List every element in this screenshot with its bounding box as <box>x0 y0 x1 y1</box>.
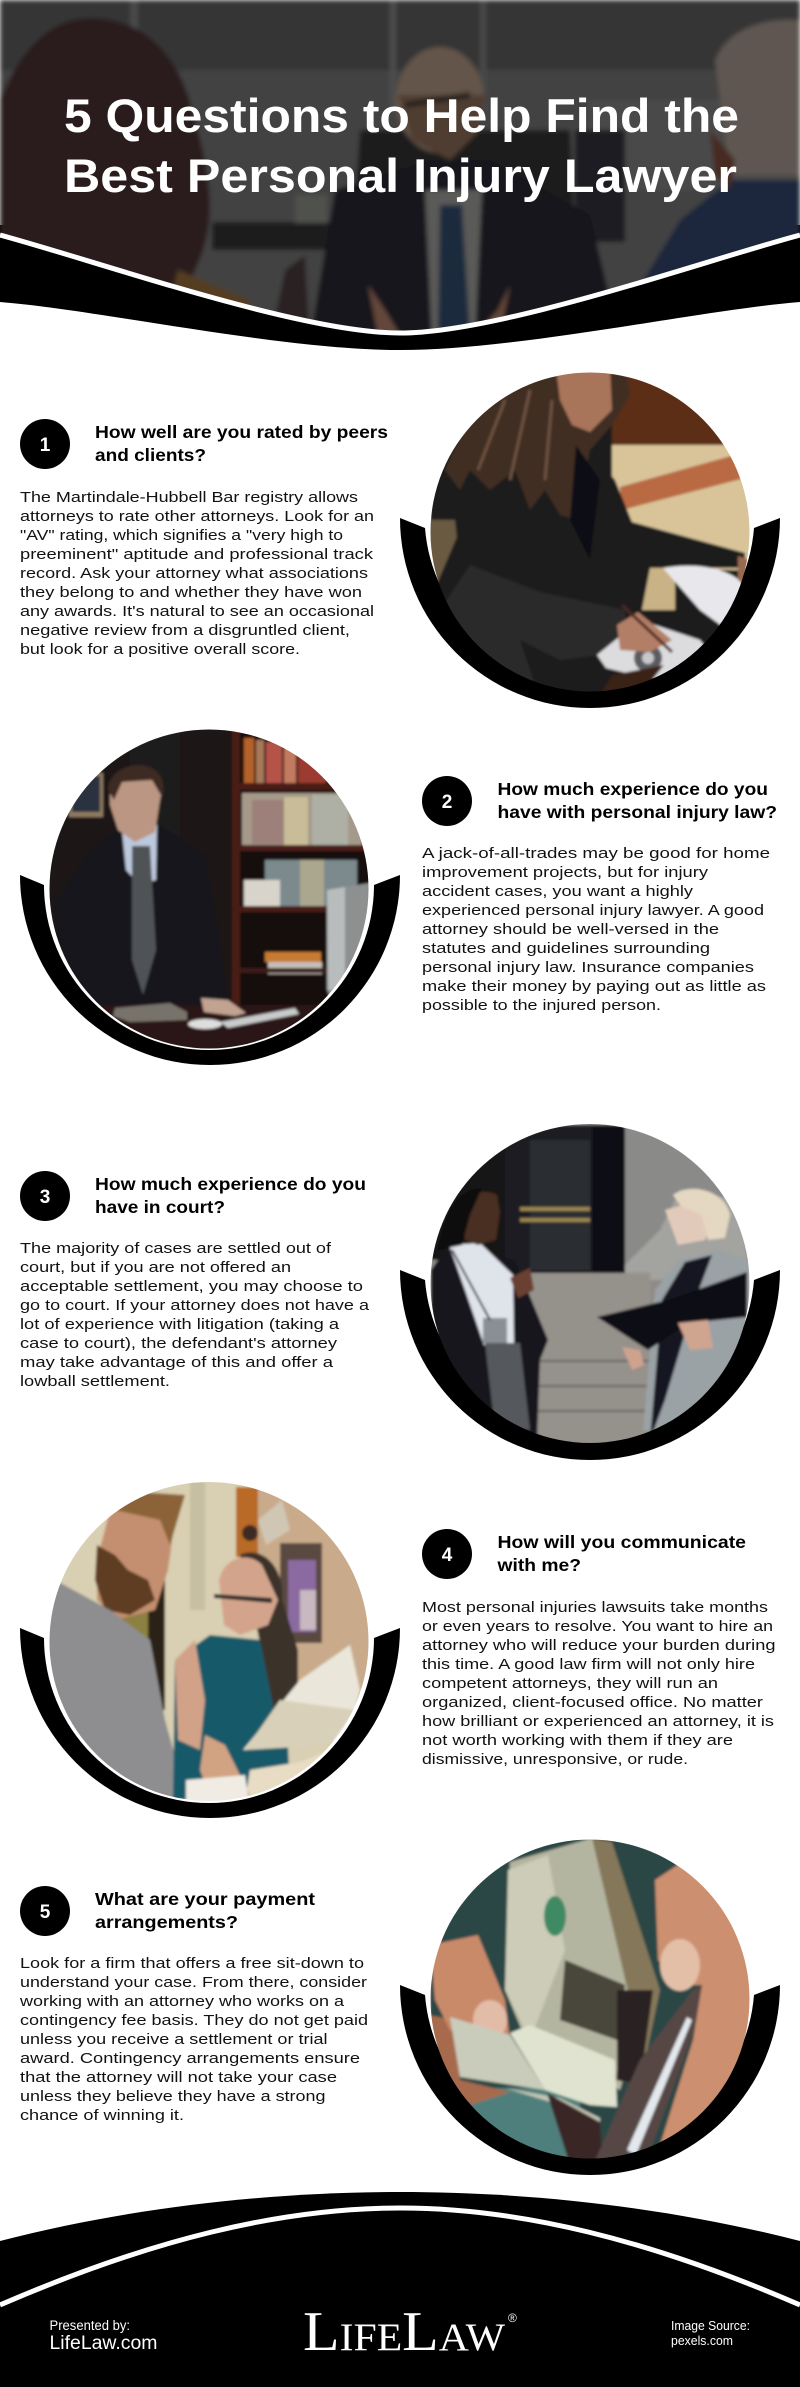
body text 1: "AV" rating, which signifies a "very high to <box>20 527 343 544</box>
footer band <box>0 2192 800 2387</box>
heading 3 <box>95 1174 366 1217</box>
body text 4: Most personal injuries lawsuits take months <box>422 1599 768 1616</box>
body text 3: The majority of cases are settled out of <box>20 1240 332 1257</box>
body text 4: not worth working with them if they are <box>422 1732 733 1749</box>
photo 5: hands opening a wallet of dollar bills <box>428 1835 752 2165</box>
body text 4: how brilliant or experienced an attorney, it is <box>422 1713 774 1730</box>
heading 5 <box>95 1889 315 1932</box>
number badge 5 <box>20 1886 70 1936</box>
crescent 4 <box>20 1628 400 1818</box>
body text 5: that the attorney will not take your case <box>20 2069 337 2086</box>
body text 2 <box>422 845 770 1014</box>
body text 3: court, but if you are not offered an <box>20 1259 291 1276</box>
body text 4 <box>422 1599 776 1768</box>
heading 2: have with personal injury law? <box>498 802 777 822</box>
body text 3: may take advantage of this and offer a <box>20 1354 334 1371</box>
body text 4: organized, client-focused office. No matter <box>422 1694 763 1711</box>
section 5 <box>19 1835 780 2175</box>
body text 4: or even years to resolve. You want to hire an <box>422 1618 773 1635</box>
presented by <box>50 2318 158 2354</box>
body text 1: they belong to and whether they have won <box>20 584 362 601</box>
crescent 2 <box>20 875 400 1065</box>
logo: LifeLaw: ® <box>508 2311 517 2325</box>
body text 1: record. Ask your attorney what associations <box>20 565 368 582</box>
body text 4: competent attorneys, they will run an <box>422 1675 718 1692</box>
number badge 1 <box>20 419 70 469</box>
heading 4: with me? <box>496 1555 581 1575</box>
section 4 <box>20 1480 776 1818</box>
heading 1 <box>95 422 388 465</box>
header swoosh: black band <box>0 225 800 350</box>
header white curve line <box>0 235 800 333</box>
body text 2: experienced personal injury lawyer. A good <box>422 902 764 919</box>
body text 2: improvement projects, but for injury <box>422 864 709 881</box>
crescent 5 <box>400 1985 780 2175</box>
heading 1: How well are you rated by peers <box>95 422 388 442</box>
heading 2 <box>498 779 777 822</box>
body text 3 <box>20 1240 370 1390</box>
section 1 <box>20 365 780 708</box>
title: 5 Questions to Help Find the <box>64 89 739 142</box>
heading 2: How much experience do you <box>498 779 768 799</box>
body text 2: statutes and guidelines surrounding <box>422 940 710 957</box>
body text 2: accident cases, you want a highly <box>422 883 694 900</box>
body text 1: attorneys to rate other attorneys. Look for an <box>20 508 374 525</box>
number badge 5: 5 <box>40 1902 51 1923</box>
photo 2: lawyer in suit at bookshelf <box>45 725 375 1055</box>
photo 1: woman in black writing at a desk <box>428 365 752 700</box>
body text 5: understand your case. From there, consider <box>20 1974 367 1991</box>
crescent 1 <box>400 518 780 708</box>
body text 3: acceptable settlement, you may choose to <box>20 1278 363 1295</box>
logo: LifeLaw: LIFELAW <box>303 2301 505 2363</box>
body text 1: negative review from a disgruntled client, <box>20 622 350 639</box>
image source: pexels.com <box>671 2333 733 2348</box>
body text 5: unless you receive a settlement or trial <box>20 2031 328 2048</box>
body text 5 <box>19 1955 368 2124</box>
body text 5: award. Contingency arrangements ensure <box>20 2050 360 2067</box>
number badge 3: 3 <box>40 1187 50 1208</box>
body text 2: A jack-of-all-trades may be good for home <box>422 845 770 862</box>
body text 5: working with an attorney who works on a <box>19 1993 345 2010</box>
number badge 1: 1 <box>40 435 51 456</box>
body text 3: lot of experience with litigation (taking a <box>20 1316 340 1333</box>
title <box>64 89 739 202</box>
body text 1: any awards. It's natural to see an occasional <box>20 603 374 620</box>
image source <box>671 2318 750 2348</box>
heading 4: How will you communicate <box>498 1532 746 1552</box>
body text 5: contingency fee basis. They do not get paid <box>20 2012 368 2029</box>
body text 1: The Martindale-Hubbell Bar registry allows <box>20 489 358 506</box>
body text 3: case to court), the defendant's attorney <box>20 1335 338 1352</box>
section 3 <box>20 1120 780 1460</box>
footer white curve <box>0 2208 800 2305</box>
body text 5: chance of winning it. <box>20 2107 184 2124</box>
body text 5: Look for a firm that offers a free sit-down to <box>20 1955 364 1972</box>
presented by: LifeLaw.com <box>50 2333 158 2354</box>
number badge 2: 2 <box>442 792 452 813</box>
body text 1: but look for a positive overall score. <box>20 641 300 658</box>
image source: Image Source: <box>671 2318 750 2333</box>
crescent 3 <box>400 1270 780 1460</box>
heading 1: and clients? <box>95 445 206 465</box>
number badge 4 <box>422 1529 472 1579</box>
body text 2: make their money by paying out as little as <box>422 978 766 995</box>
body text 3: lowball settlement. <box>20 1373 170 1390</box>
photo 4: man and woman reviewing papers <box>45 1480 375 1810</box>
body text 2: attorney should be well-versed in the <box>422 921 719 938</box>
footer black shape <box>0 2192 800 2387</box>
heading 3: have in court? <box>95 1197 225 1217</box>
body text 4: this time. A good law firm will not only hire <box>422 1656 755 1673</box>
heading 5: What are your payment <box>95 1889 315 1909</box>
presented by: Presented by: <box>50 2318 130 2333</box>
heading 3: How much experience do you <box>95 1174 366 1194</box>
header photo: lawyer meeting, darkened <box>0 0 800 340</box>
number badge 3 <box>20 1171 70 1221</box>
body text 1 <box>20 489 374 658</box>
body text 4: attorney who will reduce your burden during <box>422 1637 776 1654</box>
body text 5: unless they believe they have a strong <box>20 2088 326 2105</box>
heading 4 <box>496 1532 746 1575</box>
number badge 4: 4 <box>442 1545 453 1566</box>
heading 5: arrangements? <box>95 1912 238 1932</box>
section 2 <box>20 725 777 1065</box>
photo 3: two women on courthouse steps <box>430 1120 750 1445</box>
body text 4: dismissive, unresponsive, or rude. <box>422 1751 688 1768</box>
body text 3: go to court. If your attorney does not have a <box>20 1297 370 1314</box>
body text 1: preeminent" aptitude and professional track <box>20 546 374 563</box>
title: Best Personal Injury Lawyer <box>64 149 737 202</box>
body text 2: personal injury law. Insurance companies <box>422 959 754 976</box>
number badge 2 <box>422 776 472 826</box>
body text 2: possible to the injured person. <box>422 997 661 1014</box>
